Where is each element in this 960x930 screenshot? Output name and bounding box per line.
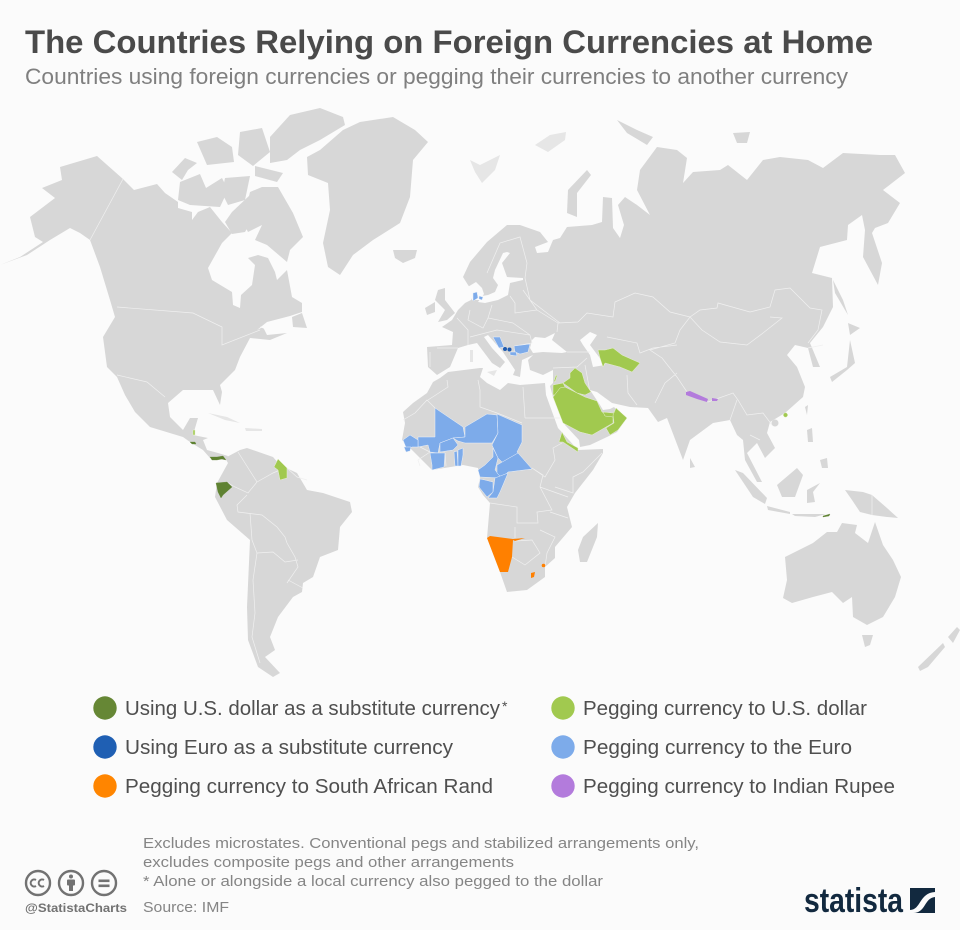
legend item: Euro substitute: Using Euro as a substitute currency	[125, 736, 454, 759]
Greenland	[307, 117, 428, 275]
Eurasia	[427, 147, 905, 482]
footnotes: excludes composite pegs and other arrangements	[143, 854, 514, 871]
Australia and New Zealand	[783, 522, 960, 671]
source: Source: IMF	[143, 899, 229, 916]
subtitle: Countries using foreign currencies or pegging their currencies to another currency	[25, 64, 848, 89]
legend	[93, 696, 895, 798]
Canadian Arctic islands	[172, 108, 345, 328]
logo: statista: statista	[804, 882, 904, 920]
country borders	[90, 179, 872, 663]
inland seas	[260, 252, 605, 367]
handle: @StatistaCharts	[25, 901, 127, 915]
legend item: U.S. dollar peg: Pegging currency to U.S. dollar	[583, 697, 867, 720]
title: The Countries Relying on Foreign Currencies at Home	[25, 24, 873, 60]
footnotes: Excludes microstates. Conventional pegs and stabilized arrangements only,	[143, 835, 699, 852]
using U.S. dollar: Ecuador, Panama, El Salvador, Timor-Leste	[190, 442, 830, 517]
South America	[215, 448, 352, 677]
pegging to South African Rand	[487, 536, 545, 578]
pegging to Indian Rupee: Nepal and Bhutan	[686, 391, 718, 402]
world map	[0, 108, 960, 677]
pegging to U.S. dollar	[193, 348, 788, 480]
legend item: Rupee peg: Pegging currency to Indian Rupee	[583, 775, 895, 798]
legend item: U.S. dollar substitute: *	[502, 698, 508, 714]
icon: creative commons licence	[26, 871, 116, 895]
Africa	[402, 368, 603, 592]
pegging to the Euro	[403, 292, 532, 498]
Iceland, Britain and Ireland	[393, 250, 455, 322]
Asia-Pacific islands	[567, 120, 898, 518]
footnotes	[143, 835, 699, 890]
legend item: Rand peg: Pegging currency to South African Rand	[125, 775, 493, 798]
faint Arctic, Caribbean and Mediterranean islands	[208, 132, 566, 431]
Madagascar	[578, 523, 598, 562]
using Euro: Kosovo and Montenegro	[503, 347, 512, 352]
North and Central America	[0, 156, 302, 460]
footnotes: * Alone or alongside a local currency also pegged to the dollar	[143, 873, 603, 890]
land masses	[0, 108, 960, 677]
legend item: U.S. dollar substitute: Using U.S. dollar as a substitute currency	[125, 697, 501, 720]
legend item: Euro peg: Pegging currency to the Euro	[583, 736, 852, 759]
